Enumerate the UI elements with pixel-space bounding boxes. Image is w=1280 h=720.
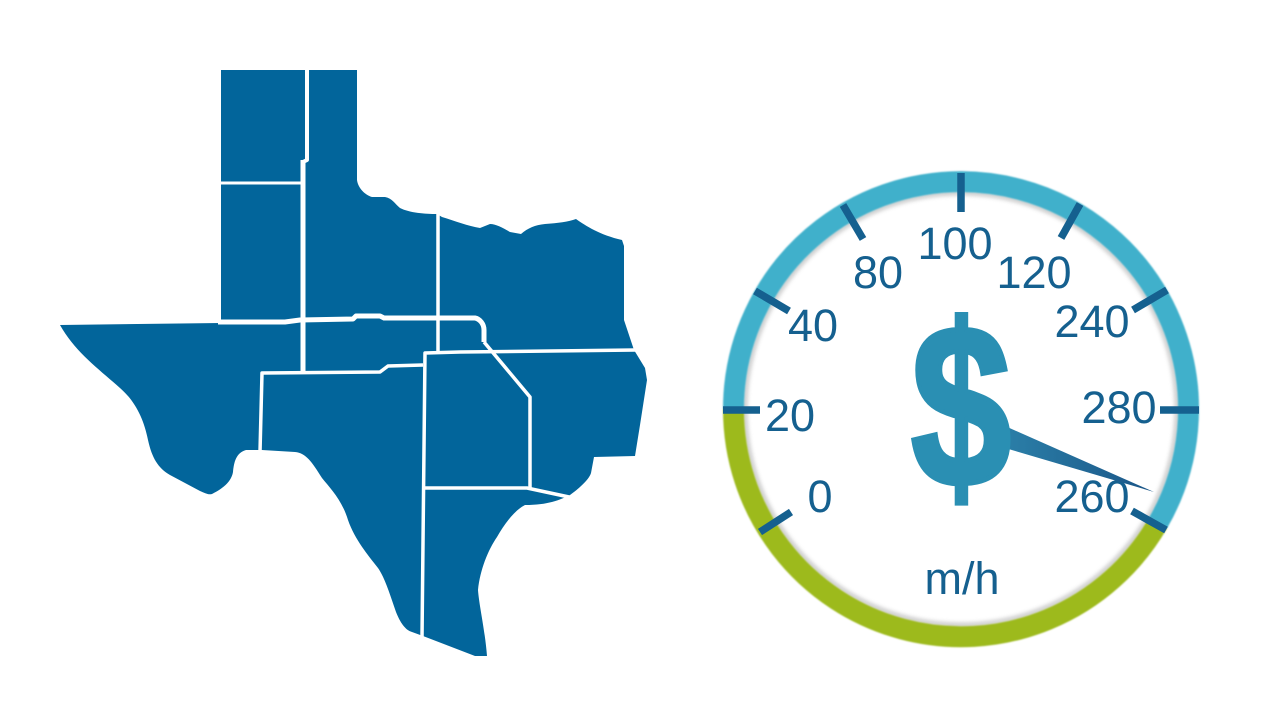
scale labels: m/h <box>924 553 1000 604</box>
green arc <box>733 409 1158 637</box>
map of Texas regions <box>60 68 647 656</box>
scale labels: 80 <box>853 247 903 298</box>
scale labels: 0 <box>807 471 833 522</box>
inner shadow of gauge ring <box>745 193 1177 625</box>
scale labels: 240 <box>1054 296 1130 347</box>
state silhouette <box>60 70 647 656</box>
region boundary lines <box>218 68 640 638</box>
scale labels: 100 <box>917 218 993 269</box>
scale labels: 120 <box>996 247 1072 298</box>
blue arc <box>734 182 1188 523</box>
needle <box>1005 426 1154 492</box>
scale labels: 40 <box>788 300 838 351</box>
scale labels: 20 <box>765 390 815 441</box>
scale labels: 280 <box>1081 382 1157 433</box>
scale labels <box>765 218 1157 604</box>
dollar sign: $ <box>911 276 1011 535</box>
speedometer gauge <box>723 173 1199 637</box>
tick marks <box>723 173 1199 532</box>
scale labels: 260 <box>1054 471 1130 522</box>
